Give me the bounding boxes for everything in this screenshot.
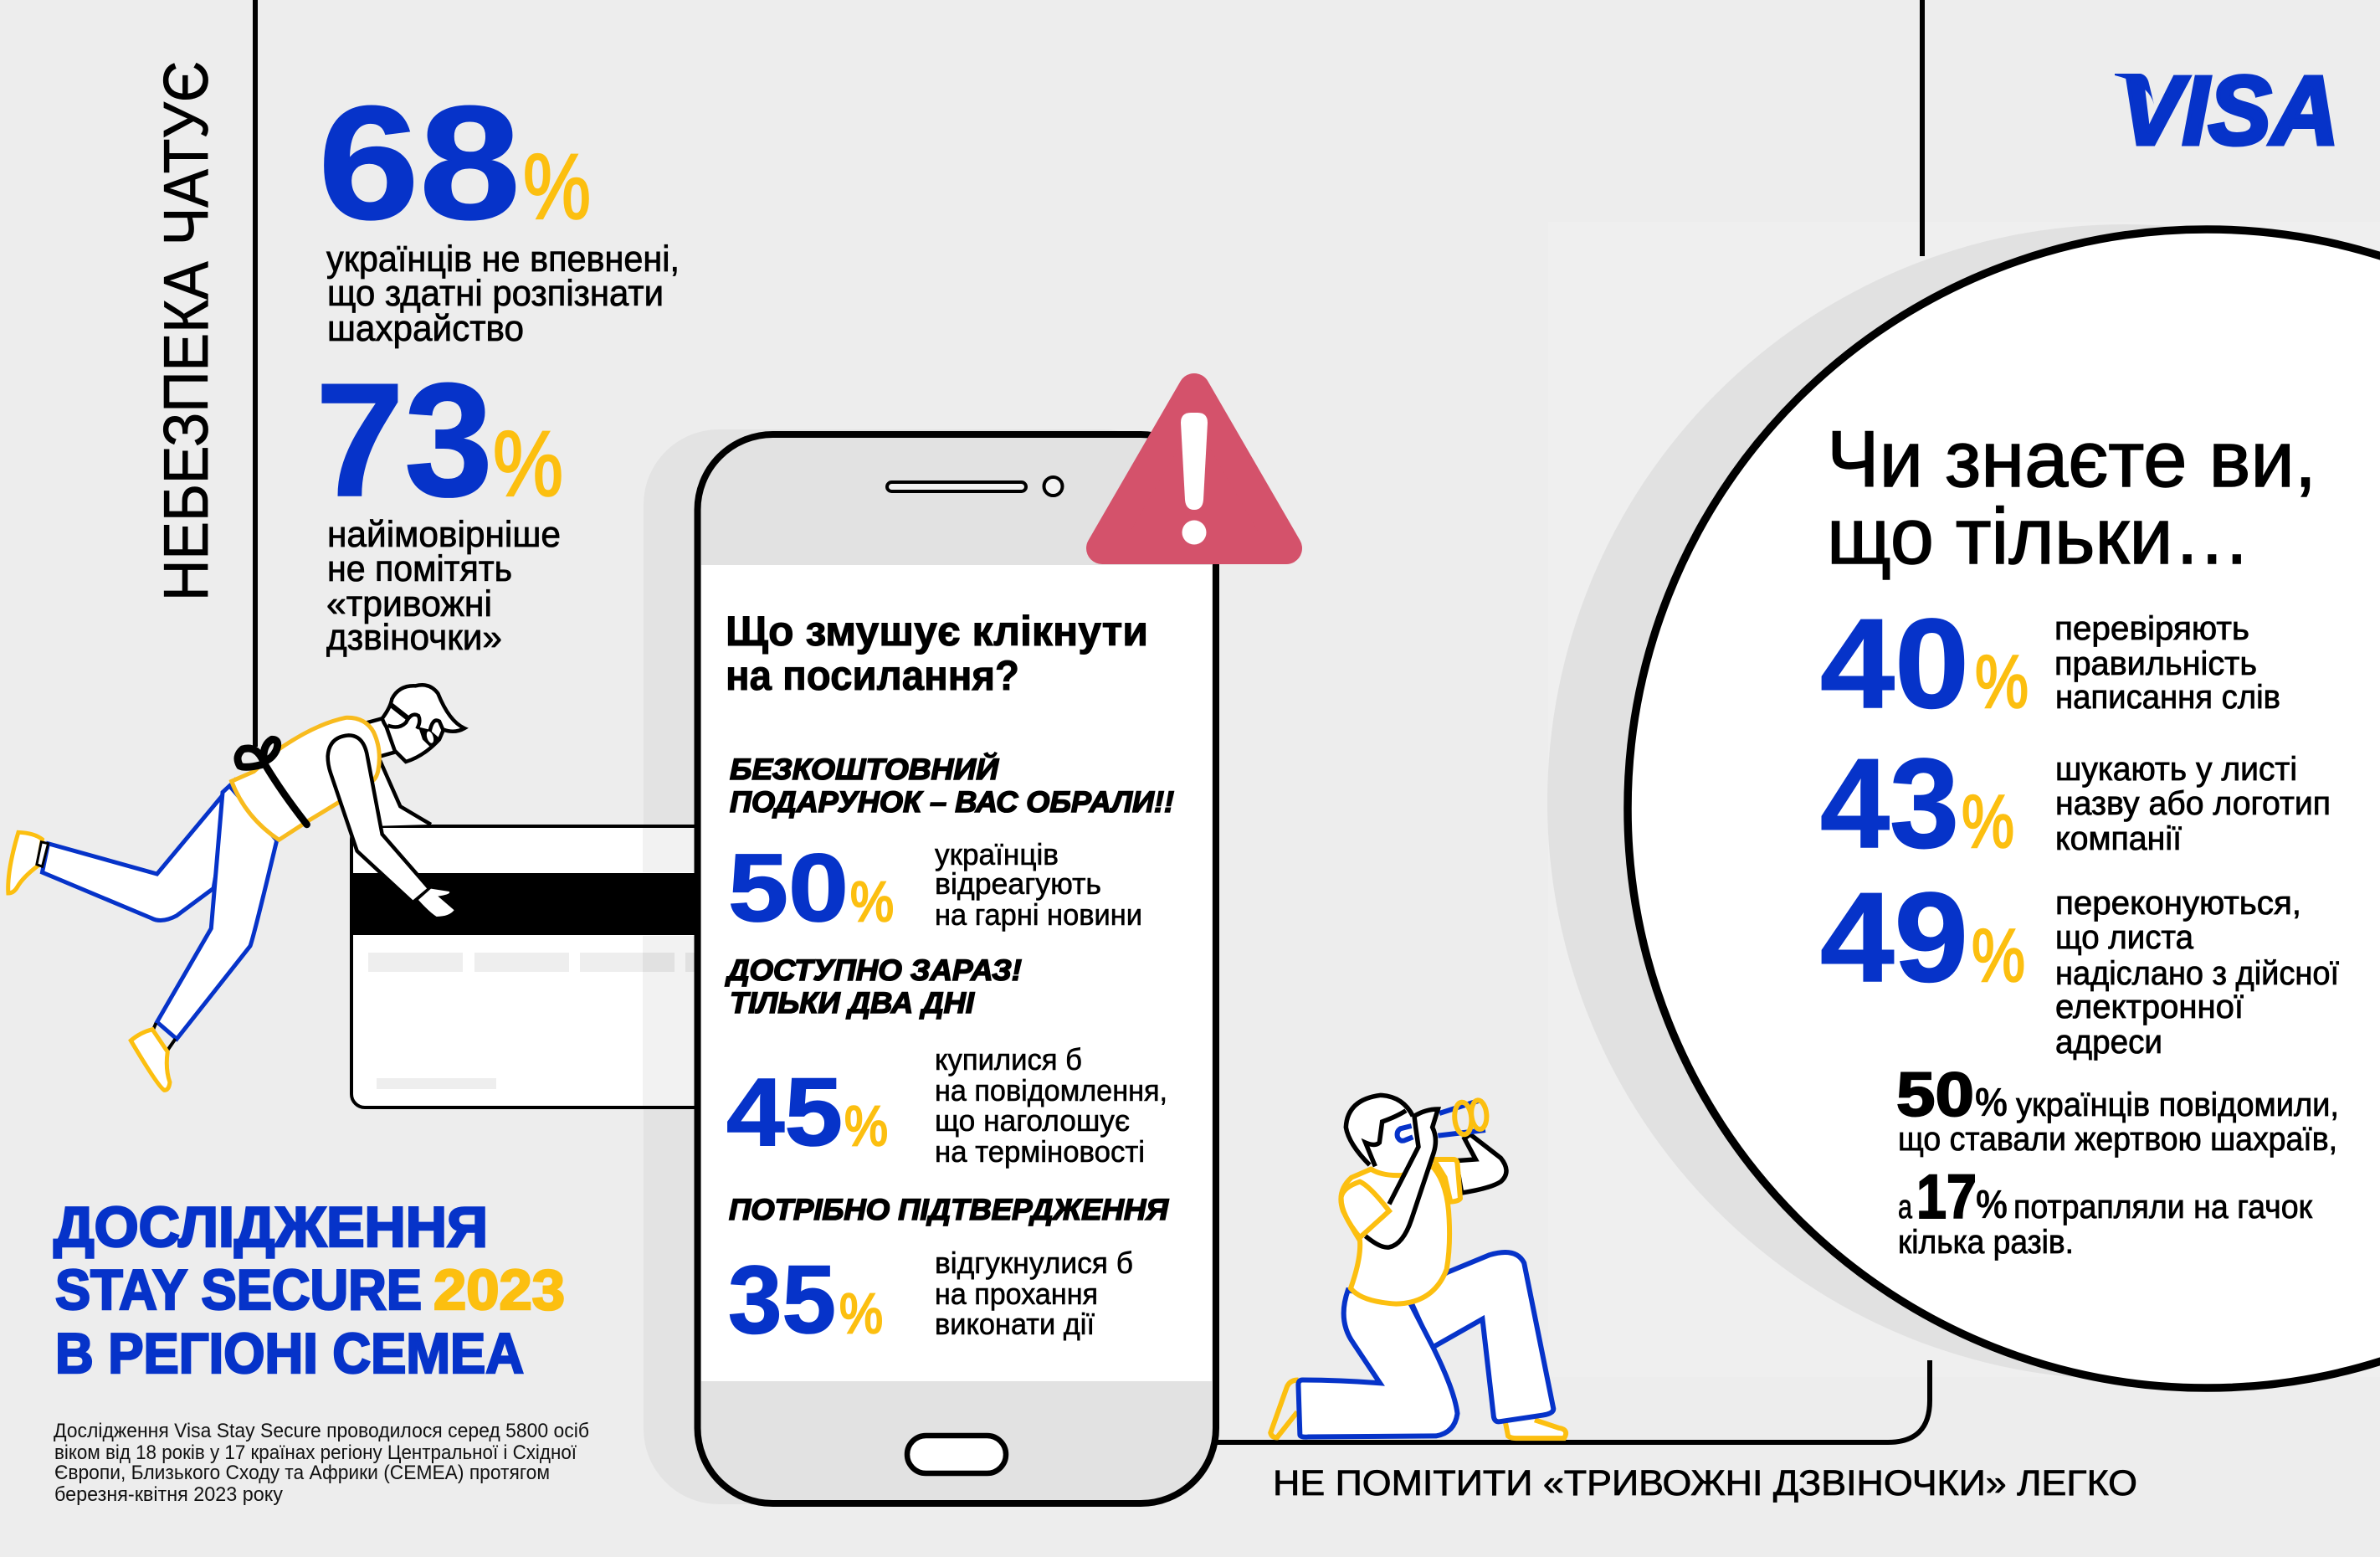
bank card: [351, 826, 720, 1107]
phone block: confirmation needed: виконати дії: [935, 1307, 1095, 1341]
stat: 49 percent: адреси: [2055, 1024, 2162, 1061]
phone block: available now: [725, 954, 1167, 1169]
stat: 68 percent: 68: [318, 72, 521, 253]
callout: victims of fraud: %: [1976, 1183, 2008, 1227]
stat: 68 percent: що здатні розпізнати: [327, 273, 664, 314]
phone block: available now: 45: [726, 1059, 843, 1166]
stat: 68 percent: %: [523, 136, 591, 239]
phone block: confirmation needed: ПОТРІБНО ПІДТВЕРДЖЕННЯ: [729, 1194, 1170, 1226]
connector line to phone: [1216, 1360, 1930, 1442]
illustration: kneeling person with binoculars: [1270, 1095, 1566, 1438]
callout: victims of fraud: українців повідомили,: [2016, 1087, 2339, 1123]
phone block: available now: на повідомлення,: [935, 1073, 1167, 1107]
phone heading: [726, 608, 1148, 699]
icon: warning triangle: [1102, 389, 1286, 548]
survey title: ДОСЛІДЖЕННЯ: [54, 1195, 488, 1259]
survey footnote: Дослідження Visa Stay Secure проводилося серед 5800 осіб: [54, 1420, 589, 1442]
phone block: available now: ДОСТУПНО ЗАРАЗ!: [725, 954, 1022, 987]
callout: victims of fraud: %: [1975, 1081, 2008, 1125]
stat: 40 percent: %: [1975, 640, 2029, 723]
stat: 43 percent: назву або логотип: [2055, 785, 2331, 822]
stat: 68 percent: шахрайство: [327, 308, 524, 349]
survey title: STAY SECURE: [55, 1258, 422, 1322]
survey title: 2023: [433, 1258, 565, 1322]
phone shadow: [644, 429, 1179, 1504]
callout: victims of fraud: [1896, 1060, 2339, 1261]
callout: victims of fraud: 50: [1896, 1060, 1974, 1129]
phone block: confirmation needed: 35: [728, 1246, 836, 1354]
stat: 49 percent: %: [1972, 913, 2025, 997]
caption: easy to miss red flags: НЕ ПОМІТИТИ «ТРИВОЖНІ ДЗВІНОЧКИ» ЛЕГКО: [1273, 1463, 2137, 1503]
phone block: free gift: [728, 752, 1174, 942]
circle heading: що тільки…: [1827, 492, 2251, 581]
stat: 40 percent: правильність: [2054, 645, 2257, 682]
phone speaker: [887, 482, 1026, 491]
phone heading: Що змушує клікнути: [726, 608, 1148, 655]
stat: 73 percent: [315, 349, 563, 658]
phone block: free gift: відреагують: [935, 866, 1101, 901]
phone block: free gift: 50: [728, 835, 849, 942]
stat: 73 percent: не помітять: [327, 548, 512, 589]
stat: 43 percent: шукають у листі: [2055, 751, 2297, 788]
phone screen: [701, 565, 1212, 1381]
stat: 49 percent: надіслано з дійсної: [2055, 955, 2339, 992]
torso, arm and head: [232, 685, 464, 917]
callout: victims of fraud: потрапляли на гачок: [2013, 1189, 2312, 1226]
stat: 40 percent: перевіряють: [2054, 610, 2249, 647]
stat: 43 percent: %: [1962, 779, 2014, 863]
stat: 40 percent: 40: [1820, 593, 1969, 735]
phone block: available now: купилися б: [935, 1042, 1082, 1077]
circle shadow: [1547, 224, 2380, 1380]
legs and shoes: [1270, 1252, 1566, 1438]
phone block: confirmation needed: на прохання: [935, 1277, 1098, 1311]
stat: 73 percent: «тривожні: [326, 583, 492, 624]
stat: 49 percent: переконуються,: [2055, 885, 2301, 922]
stat: 43 percent: [1820, 732, 2331, 875]
stat: 73 percent: найімовірніше: [327, 514, 561, 555]
phone: [698, 434, 1216, 1503]
phone block: confirmation needed: відгукнулися б: [935, 1246, 1133, 1280]
stat: 73 percent: 73: [315, 349, 493, 530]
torso, arms and head: [1341, 1095, 1506, 1304]
vertical heading: НЕБЕЗПЕКА ЧАТУЄ: [151, 61, 221, 601]
stat: 68 percent: українців не впевнені,: [326, 239, 680, 280]
stat: 43 percent: 43: [1820, 732, 1959, 875]
phone block: free gift: на гарні новини: [935, 897, 1142, 932]
circle panel: [1628, 229, 2380, 1388]
stat: 68 percent: [318, 72, 680, 349]
phone block: confirmation needed: [728, 1194, 1170, 1354]
stat: 43 percent: компанії: [2055, 820, 2182, 857]
circle heading: Чи знаєте ви,: [1827, 415, 2316, 504]
phone block: free gift: %: [850, 871, 894, 933]
stat: 49 percent: електронної: [2055, 989, 2244, 1025]
phone camera: [1044, 477, 1063, 496]
phone block: available now: ТІЛЬКИ ДВА ДНІ: [730, 987, 975, 1020]
phone home button: [907, 1436, 1006, 1473]
survey title: [54, 1195, 565, 1385]
survey footnote: віком від 18 років у 17 країнах регіону Центральної і Східної: [54, 1441, 577, 1464]
stat: 40 percent: [1820, 593, 2280, 735]
stat: 40 percent: написання слів: [2055, 679, 2280, 716]
callout: victims of fraud: а: [1898, 1189, 1913, 1226]
logo: Visa: VISA: [2120, 56, 2339, 165]
stat: 49 percent: [1820, 866, 2339, 1061]
stat: 73 percent: дзвіночки»: [326, 617, 502, 658]
survey footnote: [54, 1420, 589, 1506]
legs and shoes: [8, 784, 277, 1090]
stat: 49 percent: що листа: [2055, 919, 2194, 956]
phone block: available now: що наголошує: [935, 1103, 1130, 1138]
illustration: falling man on rope: [8, 685, 464, 1090]
phone block: available now: %: [844, 1095, 888, 1158]
phone block: free gift: БЕЗКОШТОВНИЙ: [730, 752, 999, 786]
phone block: free gift: українців: [935, 837, 1059, 871]
callout: victims of fraud: 17: [1916, 1162, 1977, 1231]
phone block: free gift: ПОДАРУНОК – ВАС ОБРАЛИ!!: [730, 786, 1174, 819]
stat: 49 percent: 49: [1820, 866, 1968, 1009]
survey footnote: Європи, Близького Сходу та Африки (СЕМЕА) протягом: [54, 1462, 550, 1484]
survey title: В РЕГІОНІ СЕМЕА: [55, 1322, 524, 1385]
phone block: available now: на терміновості: [935, 1134, 1145, 1169]
phone block: confirmation needed: %: [839, 1282, 883, 1345]
stat: 73 percent: %: [493, 413, 563, 516]
circle heading: [1827, 415, 2316, 581]
phone heading: на посилання?: [726, 652, 1019, 699]
callout: victims of fraud: що ставали жертвою шахраїв,: [1898, 1121, 2337, 1158]
survey footnote: березня-квітня 2023 року: [54, 1483, 283, 1506]
callout: victims of fraud: кілька разів.: [1898, 1224, 2074, 1261]
